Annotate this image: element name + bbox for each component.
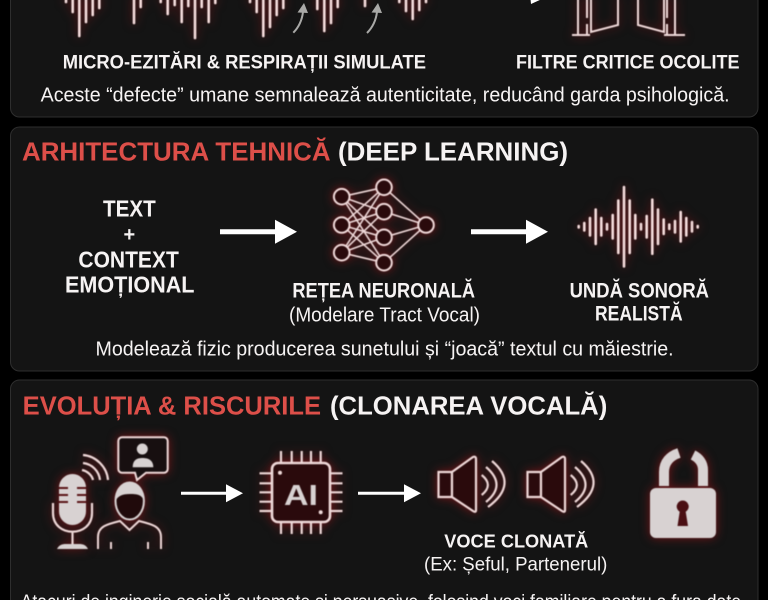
label: cloned voice: VOCE CLONATĂ — [444, 530, 588, 551]
label: micro-hesitations: MICRO-EZITĂRI & RESPIRAȚII SIMULATE — [63, 50, 426, 73]
arrow: breath marker two — [367, 3, 382, 33]
icon: waveform with micro-hesitations — [66, 0, 426, 38]
caption: human defects: Aceste “defecte” umane semnalează autenticitate, reducând garda psihologică. — [41, 85, 730, 107]
sublabel: vocal tract modelling: (Modelare Tract Vocal) — [289, 304, 480, 327]
icon: person with speech bubble — [98, 437, 168, 549]
arrow: to open doors — [530, 0, 542, 4]
heading: evolution and risks: EVOLUȚIA & RISCURILE — [23, 392, 321, 420]
arrow: AI to cloned voice — [358, 484, 421, 502]
icon: AI chip — [260, 451, 342, 534]
heading: technical architecture — [22, 137, 568, 167]
panel: human imperfections — [10, 0, 758, 117]
label: realistic sound wave: REALISTĂ — [595, 303, 683, 326]
icon: microphone — [53, 455, 108, 549]
input text block — [65, 196, 194, 298]
icon: neural network — [334, 180, 434, 270]
icon: broken padlock — [650, 453, 716, 538]
label: bypassed filters: FILTRE CRITICE OCOLITE — [516, 51, 740, 73]
caption: models sound production: Modelează fizic producerea sunetului și “joacă” textul cu măiestrie. — [96, 339, 674, 361]
panel: evolution and risks — [10, 380, 758, 600]
icon: sound wave — [579, 187, 698, 266]
arrow: voice to AI — [181, 484, 243, 502]
panel: technical architecture — [10, 127, 758, 371]
icon: AI chip: AI — [284, 480, 318, 512]
heading: technical architecture: ARHITECTURA TEHNICĂ — [22, 137, 331, 167]
arrow: network to sound wave — [471, 220, 548, 244]
label: neural network: REȚEA NEURONALĂ — [292, 280, 475, 303]
sublabel: examples: (Ex: Șeful, Partenerul) — [424, 554, 607, 576]
heading: evolution and risks: (CLONAREA VOCALĂ) — [330, 391, 607, 420]
input text block: TEXT — [103, 196, 156, 222]
heading: evolution and risks — [23, 391, 607, 420]
label: realistic sound wave — [570, 280, 709, 326]
icon: speaker one — [438, 457, 505, 512]
icon: open doors — [572, 0, 685, 35]
input text block: EMOȚIONAL — [65, 272, 194, 298]
input text block: CONTEXT — [78, 247, 179, 273]
input text block: + — [123, 224, 135, 246]
label: realistic sound wave: UNDĂ SONORĂ — [570, 280, 709, 303]
arrow: breath marker one — [293, 3, 308, 33]
heading: technical architecture: (DEEP LEARNING) — [338, 137, 568, 167]
arrow: text to network — [220, 220, 297, 244]
icon: speaker two — [528, 457, 594, 512]
